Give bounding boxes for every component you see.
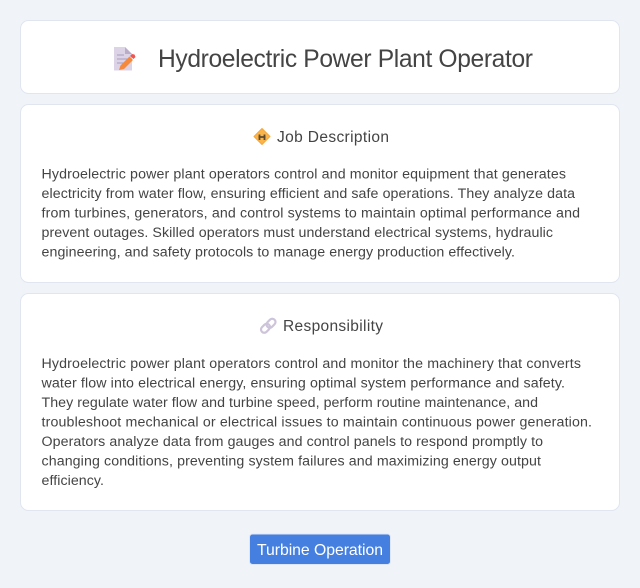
text block: job description: engineering, and safety protocols to manage energy production effectively. <box>42 244 515 260</box>
text block: job description <box>42 166 580 260</box>
panel: responsibility <box>20 294 620 510</box>
heading: responsibility: Responsibility <box>283 318 383 335</box>
heading: job description: Job Description <box>277 129 389 146</box>
icon: document with pencil <box>114 47 136 70</box>
icon: chain link <box>260 317 277 334</box>
panel: title card <box>20 20 620 94</box>
button: turbine operation <box>250 534 390 564</box>
title: Hydroelectric Power Plant Operator <box>158 46 533 73</box>
text block: responsibility: They regulate water flow and turbine speed, perform routine maintenance, and <box>42 395 538 411</box>
text block: responsibility: Hydroelectric power plant operators control and monitor the machinery that converts <box>42 356 581 372</box>
text block: job description: Hydroelectric power plant operators control and monitor equipment that generates <box>42 166 566 182</box>
panel: job description <box>20 104 620 282</box>
text block: responsibility: Operators analyze data from gauges and control panels to respond promptly to <box>42 434 543 450</box>
text block: responsibility: troubleshoot mechanical or electrical issues to maintain continuous power generation. <box>42 414 592 430</box>
text block: responsibility: changing conditions, preventing system failures and maximizing energy output <box>42 454 541 470</box>
text block: responsibility: efficiency. <box>42 473 104 489</box>
text block: job description: electricity from water flow, ensuring efficient and safe operations. They analyze data <box>42 186 575 202</box>
text block: responsibility: water flow into electrical energy, ensuring optimal system performance and safety. <box>40 376 565 392</box>
text block: job description: prevent outages. Skilled operators must understand electrical systems, hydraulic <box>42 225 553 241</box>
text block: responsibility <box>40 356 592 489</box>
button: turbine operation: Turbine Operation <box>257 542 383 559</box>
icon: diamond sign <box>254 128 270 144</box>
text block: job description: from turbines, generators, and control systems to maintain optimal performance and <box>42 206 580 222</box>
